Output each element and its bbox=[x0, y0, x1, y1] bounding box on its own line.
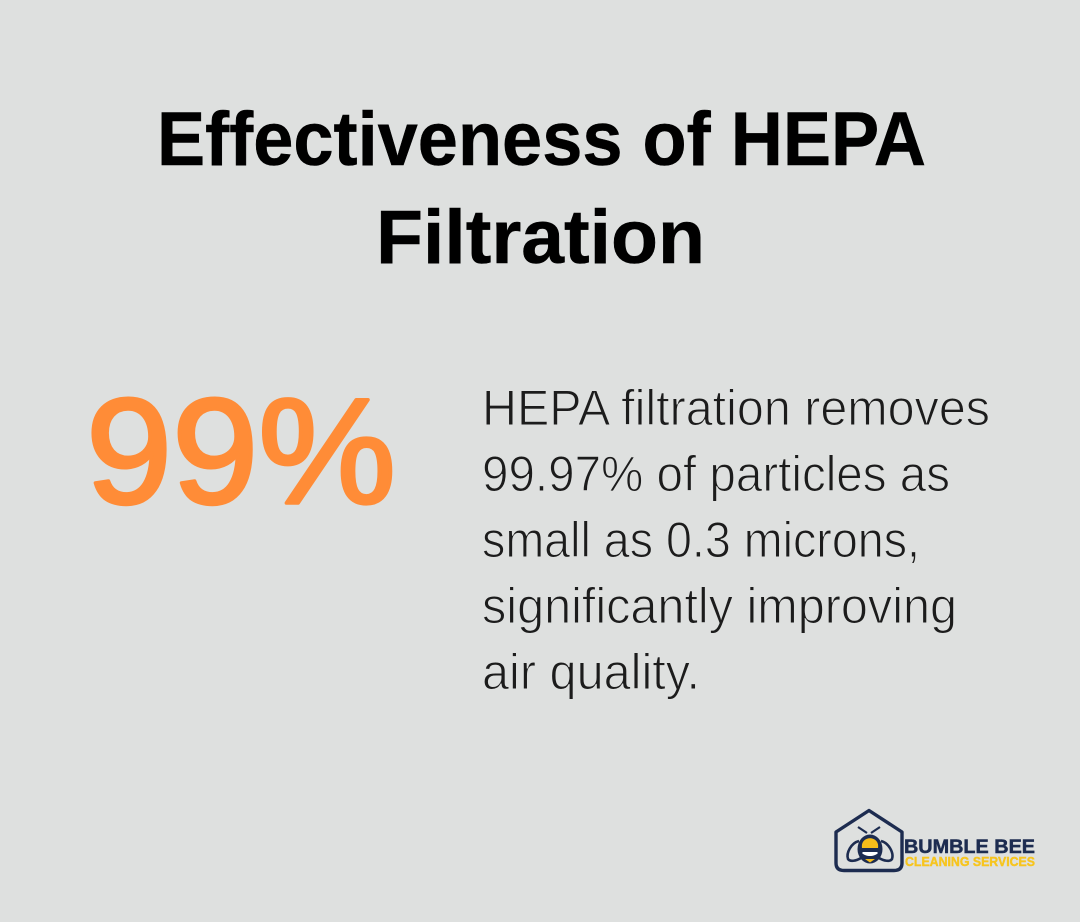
title: Filtration bbox=[376, 195, 705, 280]
title: Effectiveness of HEPA bbox=[157, 97, 926, 182]
logo wordmark: BUMBLE BEE bbox=[904, 836, 1035, 858]
icon: house outline bbox=[836, 810, 902, 870]
description text: HEPA filtration removes bbox=[482, 380, 990, 436]
logo tagline: CLEANING SERVICES bbox=[905, 855, 1035, 869]
big statistic: 99%: 99% bbox=[86, 367, 396, 535]
icon: bee bbox=[848, 827, 892, 864]
title bbox=[157, 97, 926, 280]
description text: significantly improving bbox=[482, 578, 957, 634]
description text: air quality. bbox=[482, 644, 700, 700]
logo: Bumble Bee Cleaning Services bbox=[836, 810, 1035, 870]
description text: small as 0.3 microns, bbox=[482, 512, 920, 568]
description text bbox=[482, 380, 990, 700]
description text: 99.97% of particles as bbox=[482, 446, 950, 502]
